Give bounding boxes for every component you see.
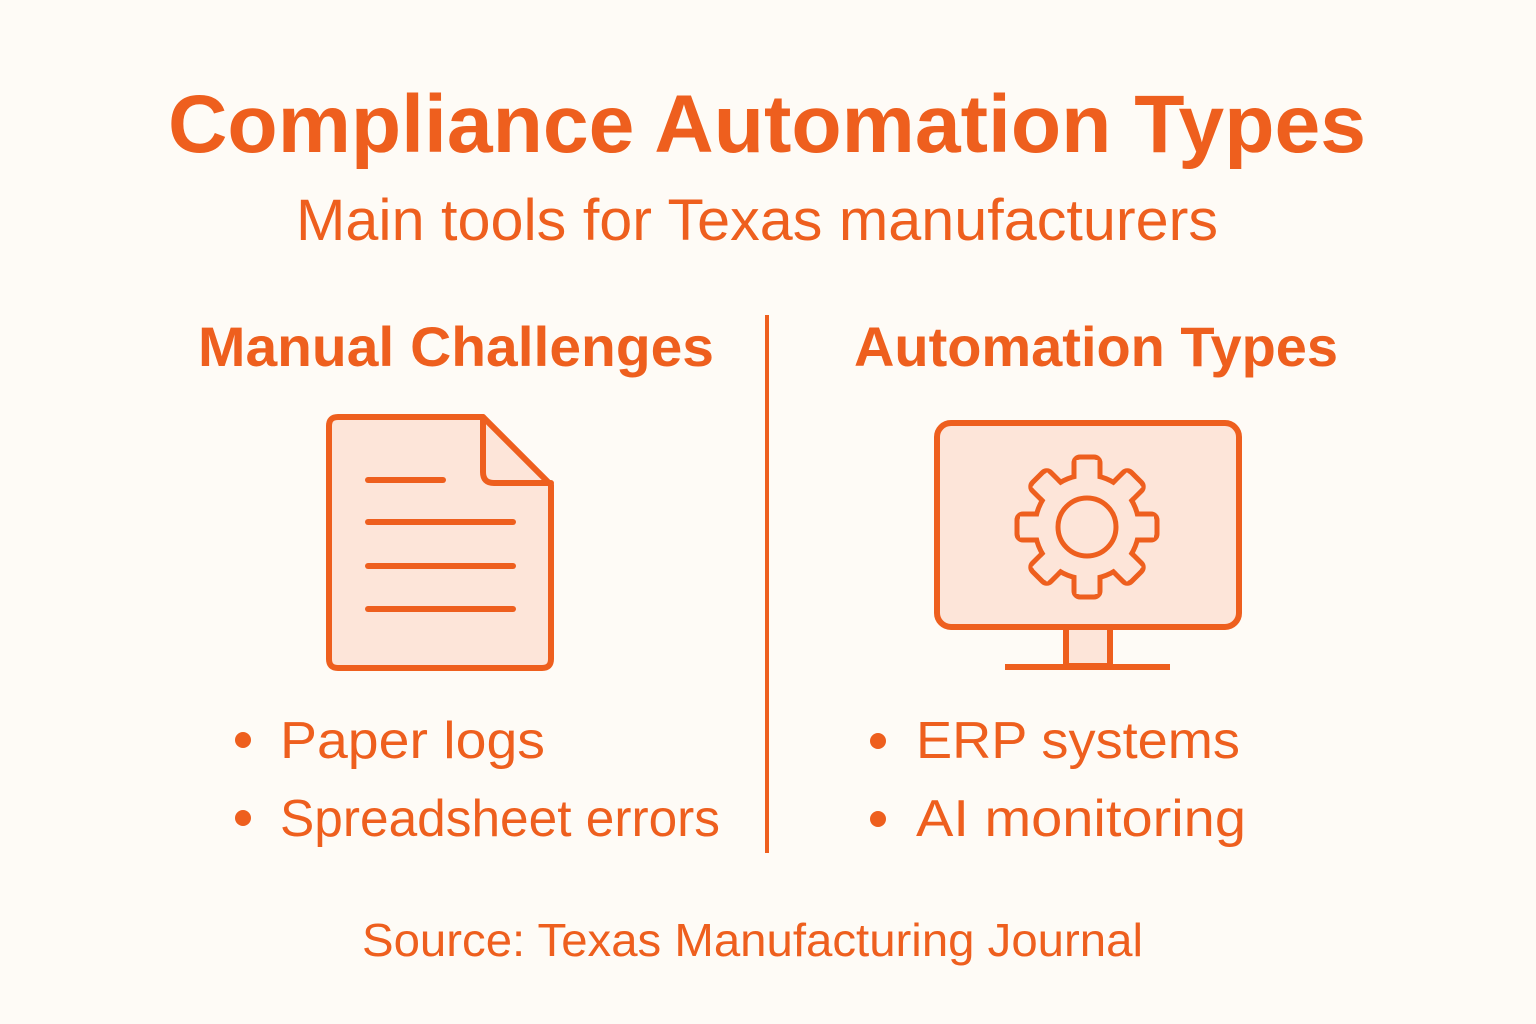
heading: automation types: Automation Types: [854, 315, 1338, 378]
bullet list: manual: Spreadsheet errors: [280, 790, 720, 848]
bullet list: automation: ERP systems: [916, 712, 1240, 770]
divider: [765, 315, 769, 853]
subtitle: Main tools for Texas manufacturers: [296, 188, 1218, 253]
panel: automation types: [854, 315, 1338, 848]
bullet list: manual: [235, 712, 720, 848]
bullet list: automation: AI monitoring: [916, 790, 1246, 848]
bullet list: manual: Paper logs: [280, 712, 545, 770]
title: Compliance Automation Types: [168, 79, 1366, 170]
icon: monitor with gear: [937, 423, 1239, 667]
icon: document: [329, 417, 551, 668]
panel: manual challenges: [198, 315, 720, 848]
heading: manual challenges: Manual Challenges: [198, 315, 714, 378]
bullet list: automation: [870, 712, 1246, 848]
source note: Source: Texas Manufacturing Journal: [362, 914, 1143, 966]
